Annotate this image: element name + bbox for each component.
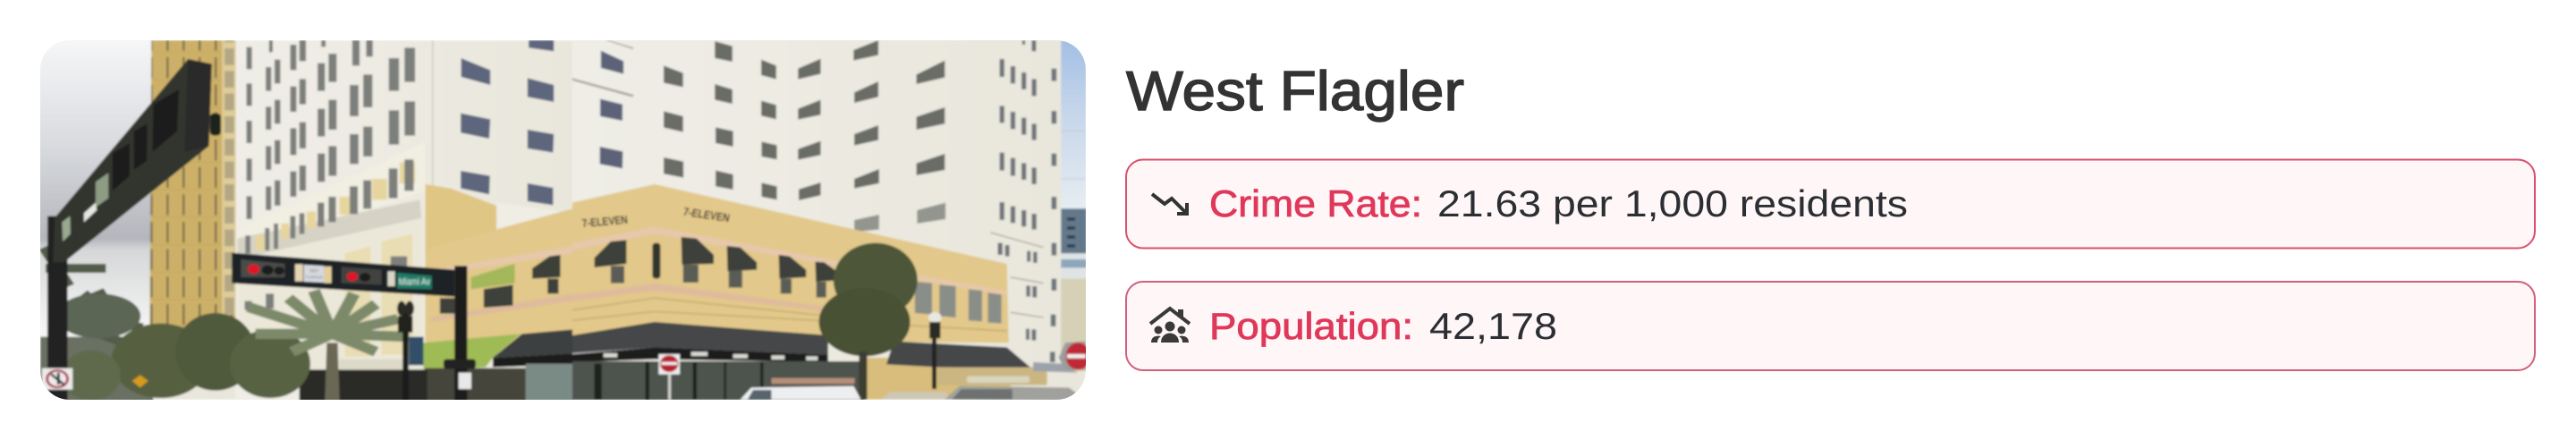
title: West Flagler xyxy=(1126,61,1464,123)
panel: population xyxy=(1126,282,2535,370)
yellow 7-Eleven storefront xyxy=(572,184,1078,400)
crime rate label: Crime Rate: xyxy=(1209,182,1422,224)
icon: trending down arrow xyxy=(1152,194,1187,214)
traffic signal arm, Miami Av xyxy=(232,253,467,401)
traffic signal arm, Miami Av: NO xyxy=(309,269,318,274)
traffic signal arm, large xyxy=(47,59,221,401)
do not enter signs xyxy=(658,342,1090,400)
parked vans and car xyxy=(741,377,1088,401)
traffic signal arm, Miami Av: Miami Av xyxy=(399,275,430,287)
right half of the photo xyxy=(572,38,1090,401)
icon: house with people xyxy=(1150,309,1190,343)
crime rate value: 21.63 per 1,000 residents xyxy=(1437,182,1908,224)
panel: crime rate xyxy=(1126,159,2535,249)
palm trees and street trees xyxy=(44,248,409,401)
tree and street lamp xyxy=(819,243,942,400)
street lamp and signs xyxy=(42,301,476,401)
population value: 42,178 xyxy=(1429,305,1557,347)
left half of the photo xyxy=(37,38,573,402)
yellow 7-Eleven storefront: 7-ELEVEN xyxy=(682,205,731,224)
population label: Population: xyxy=(1209,305,1413,347)
photo: West Flagler street corner building xyxy=(37,38,1090,402)
yellow 7-Eleven storefront: 7-ELEVEN xyxy=(581,213,629,230)
traffic signal arm, Miami Av: TURNS xyxy=(305,275,323,280)
